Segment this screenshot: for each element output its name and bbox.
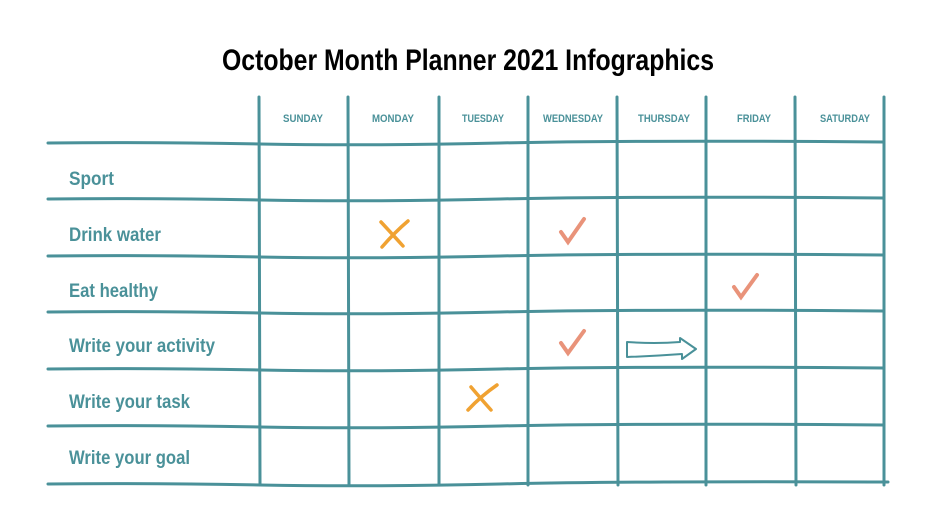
day headers: TUESDAY: [462, 113, 505, 125]
row labels: Sport: [69, 169, 115, 190]
day headers: SUNDAY: [283, 113, 324, 125]
row labels: [69, 169, 215, 469]
day headers: MONDAY: [372, 113, 415, 125]
day headers: FRIDAY: [737, 113, 772, 125]
mark: arrow thursday activity: [627, 338, 696, 359]
day headers: SATURDAY: [820, 113, 871, 125]
row labels: Write your activity: [69, 336, 215, 357]
mark: check wednesday activity: [561, 331, 584, 353]
mark: check friday eat healthy: [734, 275, 757, 297]
day headers: [283, 113, 871, 125]
row labels: Eat healthy: [69, 281, 158, 302]
mark: x tuesday task: [468, 385, 497, 410]
row labels: Write your task: [69, 392, 190, 413]
title: October Month Planner 2021 Infographics: [222, 44, 714, 77]
row labels: Drink water: [69, 225, 162, 246]
planner grid: [48, 97, 888, 486]
mark: x monday drink water: [381, 221, 408, 247]
day headers: THURSDAY: [638, 113, 691, 125]
row labels: Write your goal: [69, 448, 190, 469]
day headers: WEDNESDAY: [543, 113, 604, 125]
mark: check wednesday drink water: [561, 219, 584, 242]
